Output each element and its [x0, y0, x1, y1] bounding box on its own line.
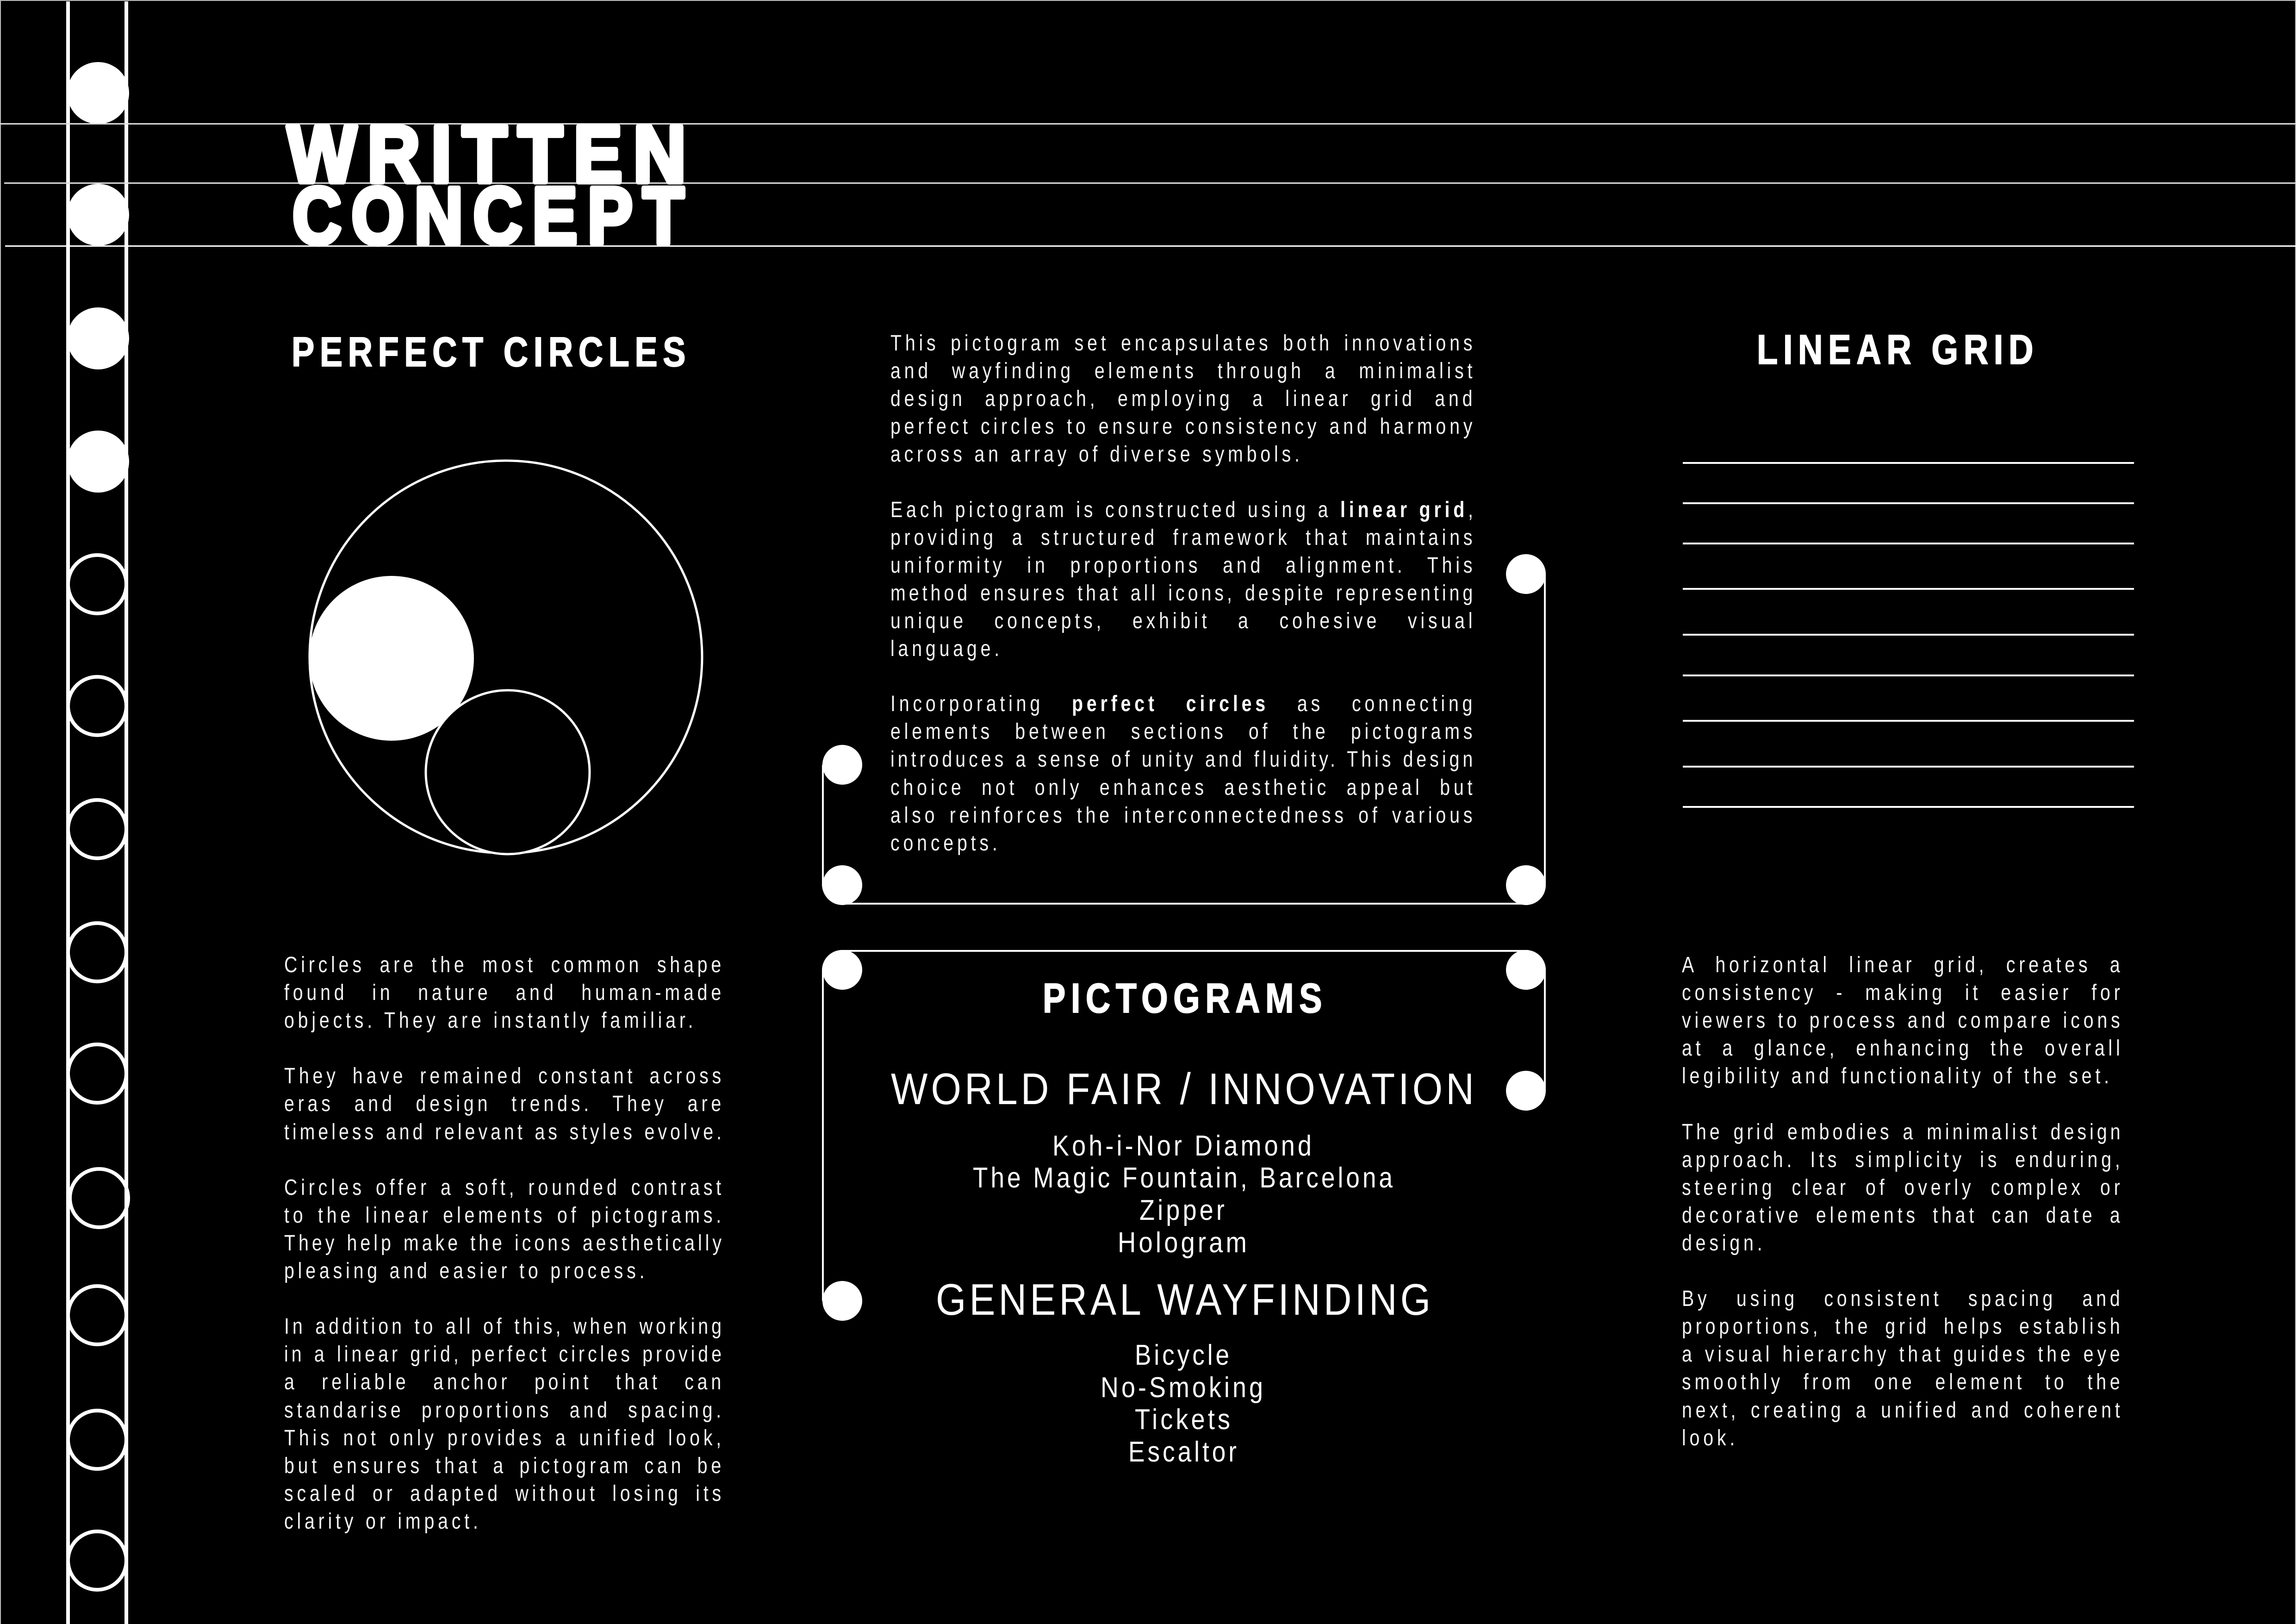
text block: intro paragraph 3: concepts. [890, 831, 1001, 856]
text block: grid paragraph 1: A horizontal linear grid, creates a [1682, 953, 2123, 977]
text block: intro paragraph 1: perfect circles to ensure consistency and harmony [890, 414, 1476, 439]
connector frame: intro text [822, 554, 1546, 905]
text block: circles paragraph 2: timeless and relevant as styles evolve. [284, 1120, 725, 1144]
vertical circle rail [66, 1, 129, 1624]
text block: intro paragraph 3: Incorporating perfect circles as connecting [890, 692, 1476, 716]
text block: circles paragraph 4: in a linear grid, perfect circles provide [284, 1342, 725, 1367]
text block: circles paragraph 1 [284, 951, 725, 1035]
text block: grid paragraph 2: approach. Its simplicity is enduring, [1682, 1148, 2123, 1172]
subheading: general wayfinding: GENERAL WAYFINDING [936, 1275, 1434, 1324]
text block: circles paragraph 3 [284, 1174, 725, 1285]
list: wayfinding pictograms: Tickets [1135, 1404, 1233, 1436]
diagram: nested perfect circles [309, 461, 702, 854]
text block: circles paragraph 2: They have remained constant across [284, 1064, 725, 1088]
text block: grid paragraph 2: steering clear of overly complex or [1682, 1175, 2123, 1200]
text block: intro paragraph 3: introduces a sense of unity and fluidity. This design [890, 747, 1476, 772]
text block: intro paragraph 2: method ensures that all icons, despite representing [890, 581, 1476, 606]
title: CONCEPT [292, 170, 694, 261]
text block: intro paragraph 3 [890, 690, 1476, 857]
text block: grid paragraph 1: at a glance, enhancing the overall [1682, 1036, 2123, 1061]
text block: grid paragraph 2: decorative elements that can date a [1682, 1203, 2123, 1228]
list: wayfinding pictograms: Bicycle [1135, 1339, 1232, 1371]
text block: grid paragraph 1 [1682, 951, 2123, 1090]
text block: grid paragraph 2: The grid embodies a minimalist design [1682, 1120, 2123, 1144]
text block: circles paragraph 2: eras and design trends. They are [284, 1092, 725, 1116]
text block: grid paragraph 2 [1682, 1118, 2123, 1257]
text block: grid paragraph 2: design. [1682, 1231, 1766, 1255]
list: world fair pictograms: Zipper [1139, 1194, 1227, 1226]
list: world fair pictograms: The Magic Fountain, Barcelona [973, 1162, 1395, 1194]
text block: intro paragraph 2: Each pictogram is constructed using a linear grid, [890, 498, 1477, 522]
list: wayfinding pictograms: Escaltor [1128, 1436, 1239, 1468]
text block: intro paragraph 3: choice not only enhances aesthetic appeal but [890, 775, 1476, 800]
horizontal title guide lines [0, 123, 2296, 247]
text block: circles paragraph 4: This not only provides a unified look, [284, 1426, 725, 1450]
text block: grid paragraph 3: smoothly from one element to the [1682, 1370, 2123, 1394]
text block: grid paragraph 3: look. [1682, 1426, 1738, 1450]
text block: circles paragraph 3: to the linear elements of pictograms. [284, 1203, 725, 1228]
subheading: world fair / innovation: WORLD FAIR / INNOVATION [891, 1064, 1477, 1114]
text block: intro paragraph 1: design approach, employing a linear grid and [890, 387, 1476, 411]
text block: grid paragraph 3 [1682, 1285, 2123, 1452]
text block: grid paragraph 3: By using consistent spacing and [1682, 1287, 2123, 1311]
list: world fair pictograms: Koh-i-Nor Diamond [1052, 1130, 1314, 1162]
text block: circles paragraph 2 [284, 1062, 725, 1146]
list: world fair pictograms [973, 1130, 1395, 1259]
text block: circles paragraph 3: Circles offer a soft, rounded contrast [284, 1175, 725, 1200]
text block: grid paragraph 3: proportions, the grid helps establish [1682, 1314, 2123, 1339]
text block: intro paragraph 3: elements between sections of the pictograms [890, 719, 1476, 744]
text block: intro paragraph 2 [890, 496, 1476, 663]
text block: circles paragraph 4: a reliable anchor point that can [284, 1370, 725, 1394]
text block: circles paragraph 4: standarise proportions and spacing. [284, 1398, 725, 1423]
text block: intro paragraph 2: language. [890, 637, 1003, 661]
text block: grid paragraph 1: legibility and functionality of the set. [1682, 1064, 2113, 1088]
text block: circles paragraph 4: scaled or adapted without losing its [284, 1481, 725, 1506]
connector frame: pictograms [822, 950, 1546, 1321]
text block: circles paragraph 1: Circles are the most common shape [284, 953, 725, 977]
text block: intro paragraph 2: providing a structured framework that maintains [890, 525, 1476, 550]
text block: circles paragraph 3: pleasing and easier to process. [284, 1259, 648, 1283]
text block: circles paragraph 1: found in nature and human-made [284, 981, 725, 1005]
text block: intro paragraph 1: and wayfinding elements through a minimalist [890, 359, 1476, 383]
text block: intro paragraph 1: This pictogram set encapsulates both innovations [890, 331, 1476, 356]
text block: circles paragraph 4: In addition to all of this, when working [284, 1314, 725, 1339]
heading: linear grid: LINEAR GRID [1757, 327, 2039, 373]
text block: circles paragraph 3: They help make the icons aesthetically [284, 1231, 725, 1255]
list: wayfinding pictograms [1101, 1339, 1266, 1468]
text block: intro paragraph 2: uniformity in proportions and alignment. This [890, 553, 1476, 578]
text block: grid paragraph 1: consistency - making it easier for [1682, 981, 2123, 1005]
text block: intro paragraph 2: unique concepts, exhibit a cohesive visual [890, 609, 1476, 633]
text block: circles paragraph 1: objects. They are instantly familiar. [284, 1008, 697, 1033]
diagram: linear grid lines [1683, 462, 2134, 808]
text block: grid paragraph 3: next, creating a unified and coherent [1682, 1398, 2123, 1423]
title: WRITTEN [287, 109, 697, 199]
text block: intro paragraph 1: across an array of diverse symbols. [890, 442, 1303, 467]
heading: pictograms: PICTOGRAMS [1043, 975, 1327, 1022]
text block: grid paragraph 3: a visual hierarchy that guides the eye [1682, 1342, 2123, 1367]
text block: circles paragraph 4 [284, 1313, 725, 1536]
text block: intro paragraph 3: also reinforces the interconnectedness of various [890, 803, 1476, 828]
heading: perfect circles: PERFECT CIRCLES [292, 329, 691, 375]
text block: circles paragraph 4: but ensures that a pictogram can be [284, 1454, 725, 1478]
text block: intro paragraph 1 [890, 330, 1476, 468]
text block: grid paragraph 1: viewers to process and compare icons [1682, 1008, 2123, 1033]
list: wayfinding pictograms: No-Smoking [1101, 1372, 1266, 1404]
title [287, 109, 697, 261]
text block: circles paragraph 4: clarity or impact. [284, 1509, 482, 1534]
list: world fair pictograms: Hologram [1118, 1227, 1250, 1259]
